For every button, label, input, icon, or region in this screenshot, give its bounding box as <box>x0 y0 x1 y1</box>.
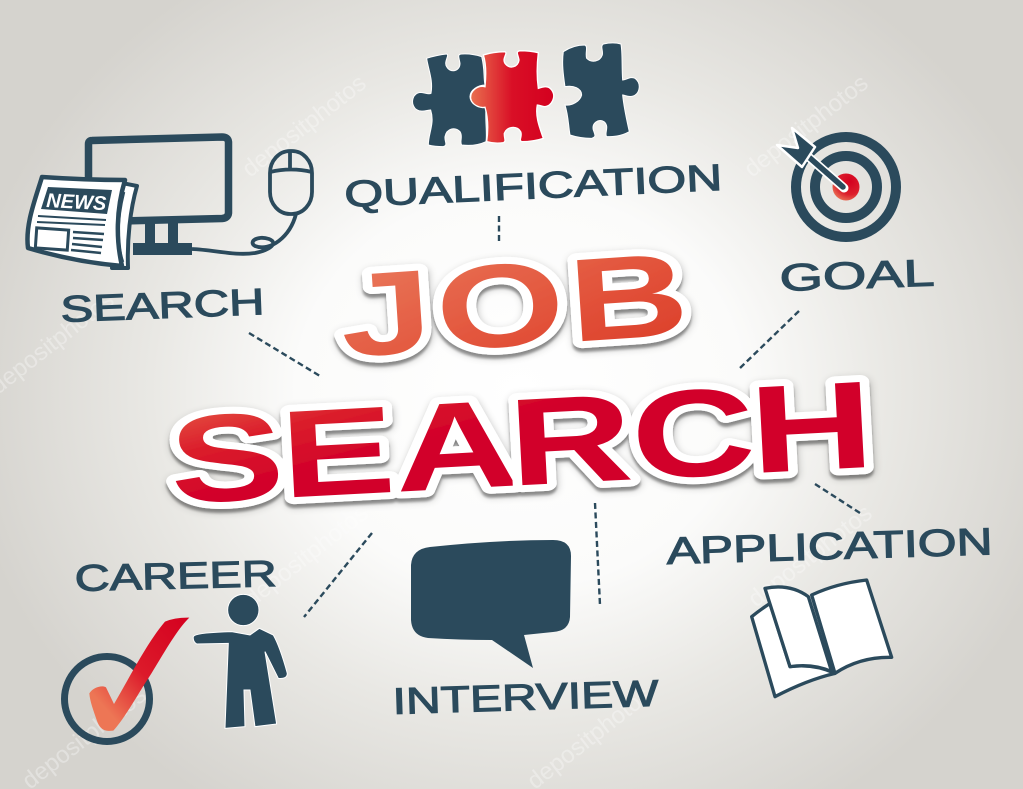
icon: computer, mouse and newspaper <box>27 137 312 268</box>
icon: person pointing <box>193 594 287 728</box>
icon: puzzle pieces <box>413 43 639 147</box>
title: search: SEARCH <box>166 355 877 530</box>
watermarks: depositphotos <box>743 499 877 613</box>
label: qualification: QUALIFICATION <box>344 157 723 215</box>
connector lines <box>249 216 860 617</box>
icon: target with arrow <box>777 128 896 237</box>
label: application: APPLICATION <box>666 521 993 573</box>
newspaper: NEWS <box>46 190 107 215</box>
mouse and cable <box>192 151 312 254</box>
icon: open book <box>752 580 892 697</box>
watermarks: depositphotos <box>490 286 624 400</box>
label: search: SEARCH <box>60 281 265 330</box>
monitor <box>88 137 228 255</box>
icon: speech bubble <box>411 540 571 668</box>
watermarks: depositphotos <box>239 499 373 613</box>
label: goal: GOAL <box>779 253 935 300</box>
icon: check mark in circle <box>64 618 189 742</box>
watermarks: depositphotos <box>739 69 873 183</box>
watermarks: depositphotos <box>237 69 371 183</box>
title: job: JOB <box>336 228 692 382</box>
newspaper <box>27 177 137 268</box>
watermarks <box>0 69 877 789</box>
label: interview: INTERVIEW <box>392 673 659 722</box>
label: career: CAREER <box>74 553 277 599</box>
